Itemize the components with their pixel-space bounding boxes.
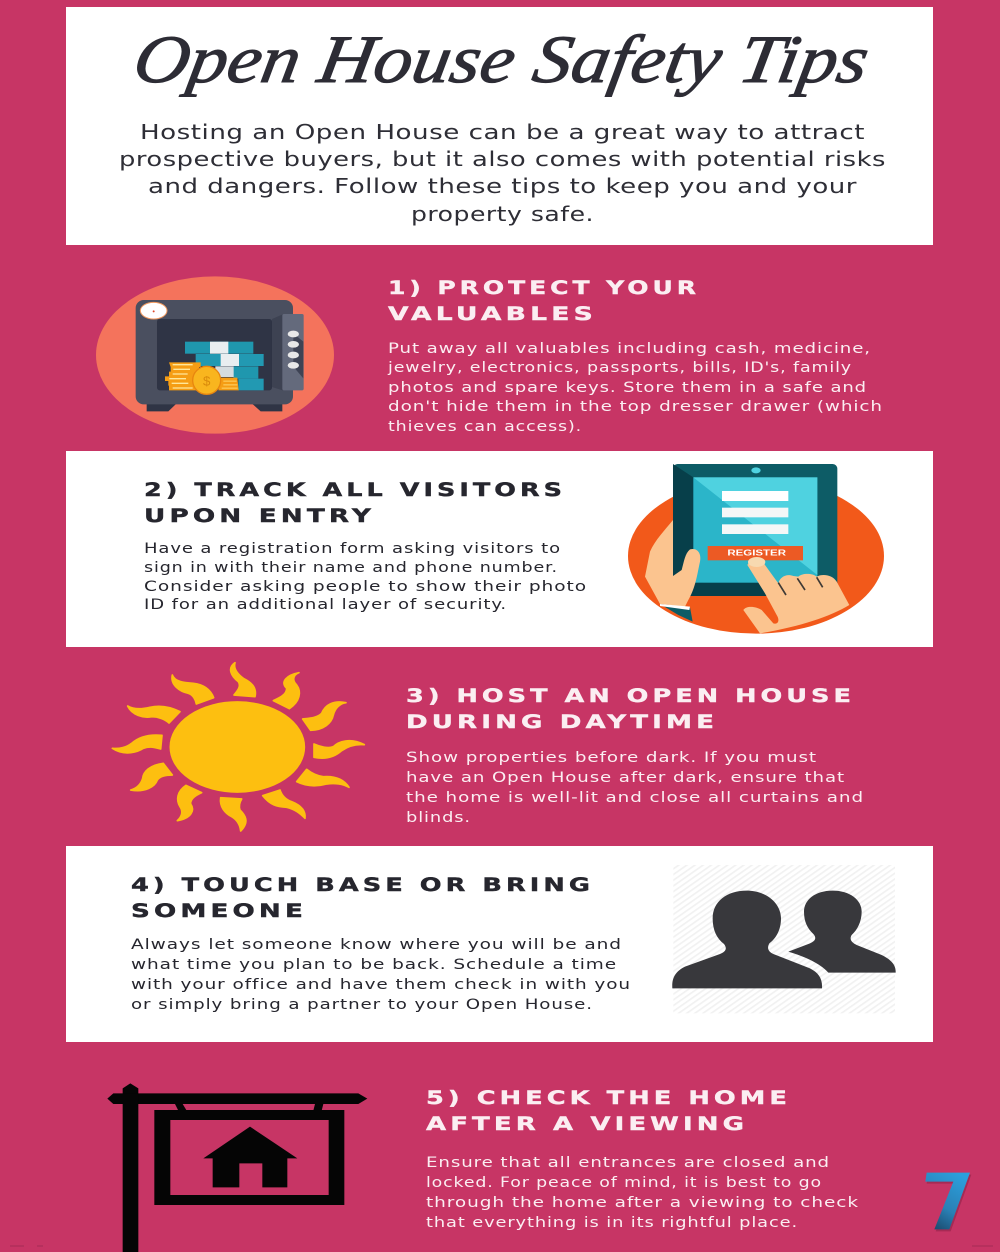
intro text: and dangers. Follow these tips to keep you and your [148, 174, 857, 198]
body text: blinds. [406, 810, 471, 826]
body text: Put away all valuables including cash, medicine, [388, 341, 871, 357]
body text: photos and spare keys. Store them in a safe and [388, 380, 867, 396]
heading: 3) HOST AN OPEN HOUSE [406, 685, 855, 707]
panel: header [66, 7, 933, 245]
body text: sign in with their name and phone number. [144, 560, 558, 576]
body text: Show properties before dark. If you must [406, 750, 817, 766]
title: Open House Safety Tips [128, 21, 875, 97]
body text: don't hide them in the top dresser drawer (which [388, 399, 883, 415]
body text: locked. For peace of mind, it is best to go [426, 1175, 822, 1191]
body text: what time you plan to be back. Schedule a time [131, 957, 617, 973]
intro text: Hosting an Open House can be a great way to attract [140, 120, 865, 144]
heading: UPON ENTRY [144, 505, 375, 527]
body text: Ensure that all entrances are closed and [426, 1155, 830, 1171]
body text: that everything is in its rightful place. [426, 1215, 798, 1231]
body text: through the home after a viewing to check [426, 1195, 859, 1211]
panel: tip 2 track all visitors [66, 451, 933, 647]
intro text [119, 120, 886, 226]
intro text: prospective buyers, but it also comes with potential risks [119, 147, 886, 171]
intro text: property safe. [411, 202, 594, 226]
body text [426, 1155, 859, 1231]
icon: sun [112, 663, 364, 831]
heading: SOMEONE [131, 900, 307, 922]
body text: thieves can access). [388, 419, 582, 435]
heading [426, 1087, 791, 1135]
heading [144, 479, 566, 527]
body text: have an Open House after dark, ensure that [406, 770, 845, 786]
heading [388, 277, 700, 325]
body text: jewelry, electronics, passports, bills, ID's, family [387, 360, 852, 376]
body text: the home is well-lit and close all curtains and [406, 790, 864, 806]
heading: 5) CHECK THE HOME [426, 1087, 791, 1109]
icon: safe [96, 276, 334, 434]
icon: two people [672, 865, 896, 1013]
icon: number seven logo [925, 1173, 971, 1231]
body text [144, 541, 587, 613]
body text: or simply bring a partner to your Open House. [131, 997, 593, 1013]
heading [406, 685, 855, 733]
body text: Have a registration form asking visitors to [144, 541, 561, 557]
heading: VALUABLES [388, 303, 597, 325]
heading: 1) PROTECT YOUR [388, 277, 700, 299]
heading: 4) TOUCH BASE OR BRING [131, 874, 594, 896]
body text: ID for an additional layer of security. [144, 597, 507, 613]
panel: tip 3 host during daytime [112, 663, 864, 831]
body text [406, 750, 864, 826]
panel: tip 1 protect your valuables [96, 276, 883, 435]
body text: with your office and have them check in with you [131, 977, 631, 993]
icon: house for sale sign [107, 1083, 367, 1252]
body text [131, 937, 631, 1013]
body text: Consider asking people to show their photo [144, 579, 587, 595]
panel: tip 5 check the home [107, 1083, 859, 1252]
body text: Always let someone know where you will be and [131, 937, 622, 953]
panel: tip 4 touch base [66, 846, 933, 1042]
heading [131, 874, 594, 922]
heading: AFTER A VIEWING [426, 1113, 748, 1135]
heading: 2) TRACK ALL VISITORS [144, 479, 566, 501]
body text [387, 341, 883, 435]
heading: DURING DAYTIME [406, 711, 718, 733]
icon: tablet register [628, 464, 884, 634]
icon: tablet register: REGISTER [727, 549, 786, 558]
icon: safe: $ [203, 373, 211, 388]
